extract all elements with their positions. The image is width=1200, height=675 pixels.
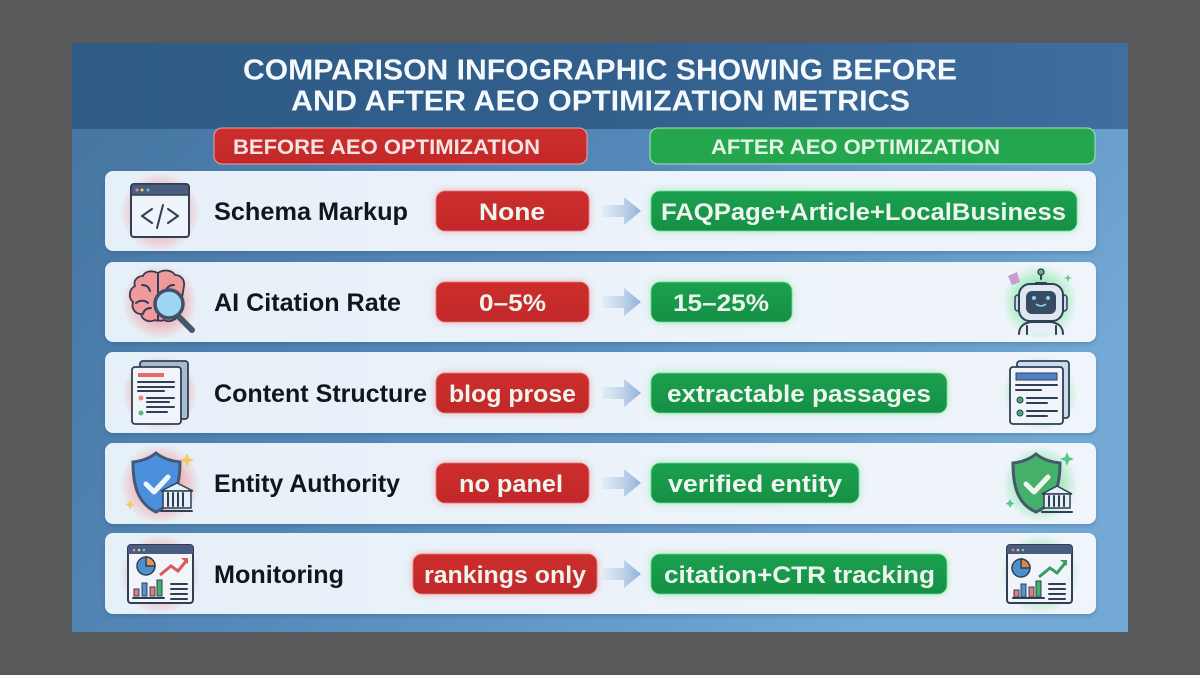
after value	[651, 554, 947, 594]
column heading: after	[650, 128, 1095, 164]
label: Content Structure	[214, 380, 427, 408]
row: Monitoring	[105, 533, 1096, 616]
arrow	[603, 469, 641, 497]
column heading: before	[214, 128, 587, 164]
after value	[651, 463, 859, 503]
icon: blue shield	[120, 444, 200, 524]
arrow	[603, 288, 641, 316]
after value: extractable passages	[667, 381, 931, 408]
row: AI Citation Rate	[105, 262, 1096, 344]
icon: document	[122, 355, 198, 431]
icon: brain with magnifier	[122, 264, 198, 340]
label: Monitoring	[214, 561, 344, 589]
row: Content Structure	[105, 352, 1096, 435]
before value	[436, 191, 589, 231]
before value	[436, 373, 589, 413]
arrow	[603, 560, 641, 588]
before value: None	[479, 199, 545, 226]
header band	[72, 43, 1128, 129]
label: Schema Markup	[214, 198, 408, 226]
after value: verified entity	[668, 471, 842, 498]
before value	[436, 463, 589, 503]
icon: structured document	[1002, 355, 1078, 431]
column heading: before: BEFORE AEO OPTIMIZATION	[233, 136, 540, 159]
title: AND AFTER AEO OPTIMIZATION METRICS	[291, 86, 910, 118]
after value	[651, 373, 947, 413]
row: Entity Authority	[105, 443, 1096, 526]
icon: green shield	[1002, 446, 1078, 522]
icon: dashboard red	[120, 534, 200, 614]
arrow	[603, 379, 641, 407]
after value	[651, 191, 1077, 231]
after value: FAQPage+Article+LocalBusiness	[661, 199, 1066, 226]
title	[243, 54, 957, 118]
label: AI Citation Rate	[214, 289, 401, 317]
after value: 15–25%	[673, 290, 769, 317]
before value: 0–5%	[479, 290, 546, 317]
label: Entity Authority	[214, 470, 400, 498]
before value: rankings only	[424, 562, 586, 589]
before value	[413, 554, 597, 594]
title: COMPARISON INFOGRAPHIC SHOWING BEFORE	[243, 54, 957, 86]
icon: code window	[120, 172, 200, 252]
before value	[436, 282, 589, 322]
arrow	[603, 197, 641, 225]
row: Schema Markup	[105, 171, 1096, 253]
before value: blog prose	[449, 381, 576, 408]
column heading: after: AFTER AEO OPTIMIZATION	[711, 136, 1000, 159]
after value: citation+CTR tracking	[664, 562, 935, 589]
background panel	[72, 43, 1128, 632]
icon: robot	[1002, 264, 1078, 340]
icon: dashboard green	[1000, 534, 1080, 614]
before value: no panel	[459, 471, 563, 498]
after value	[651, 282, 792, 322]
